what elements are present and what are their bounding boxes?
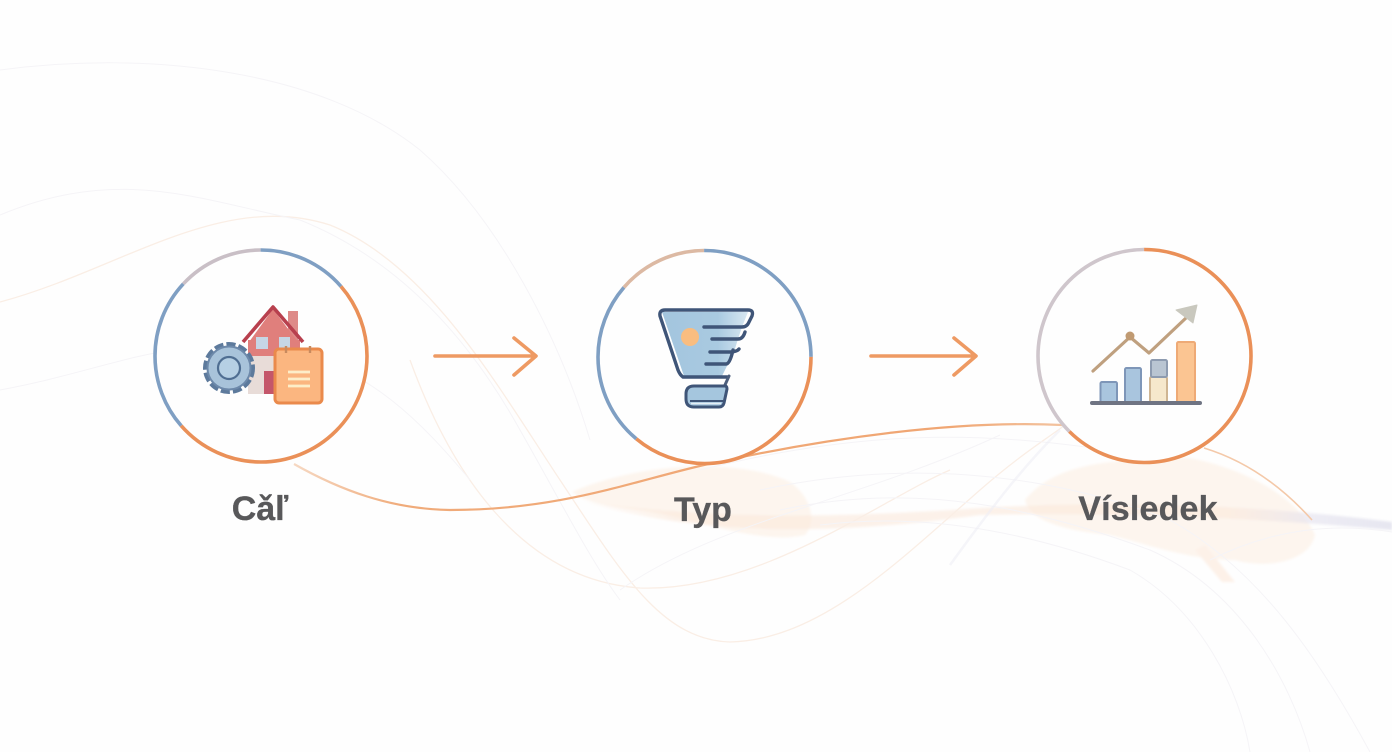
circle ring 2 (598, 250, 811, 464)
circle ring 3 (1038, 250, 1251, 462)
icon: house, gear and note (206, 307, 322, 403)
label: Cǎľ: Cǎľ (232, 490, 289, 528)
step 2: type (598, 250, 811, 529)
label: Vísledek: Vísledek (1078, 490, 1218, 528)
icon: funnel (660, 310, 752, 407)
arrow 2 (871, 338, 976, 375)
icon: bar chart with rising arrow (1092, 305, 1200, 403)
step 1: goal (155, 250, 367, 528)
main orange connecting line (294, 424, 1312, 520)
arrow 1 (435, 338, 536, 375)
circle ring 1 (155, 250, 367, 462)
label: Typ: Typ (674, 491, 732, 529)
step 3: result (1038, 250, 1251, 528)
